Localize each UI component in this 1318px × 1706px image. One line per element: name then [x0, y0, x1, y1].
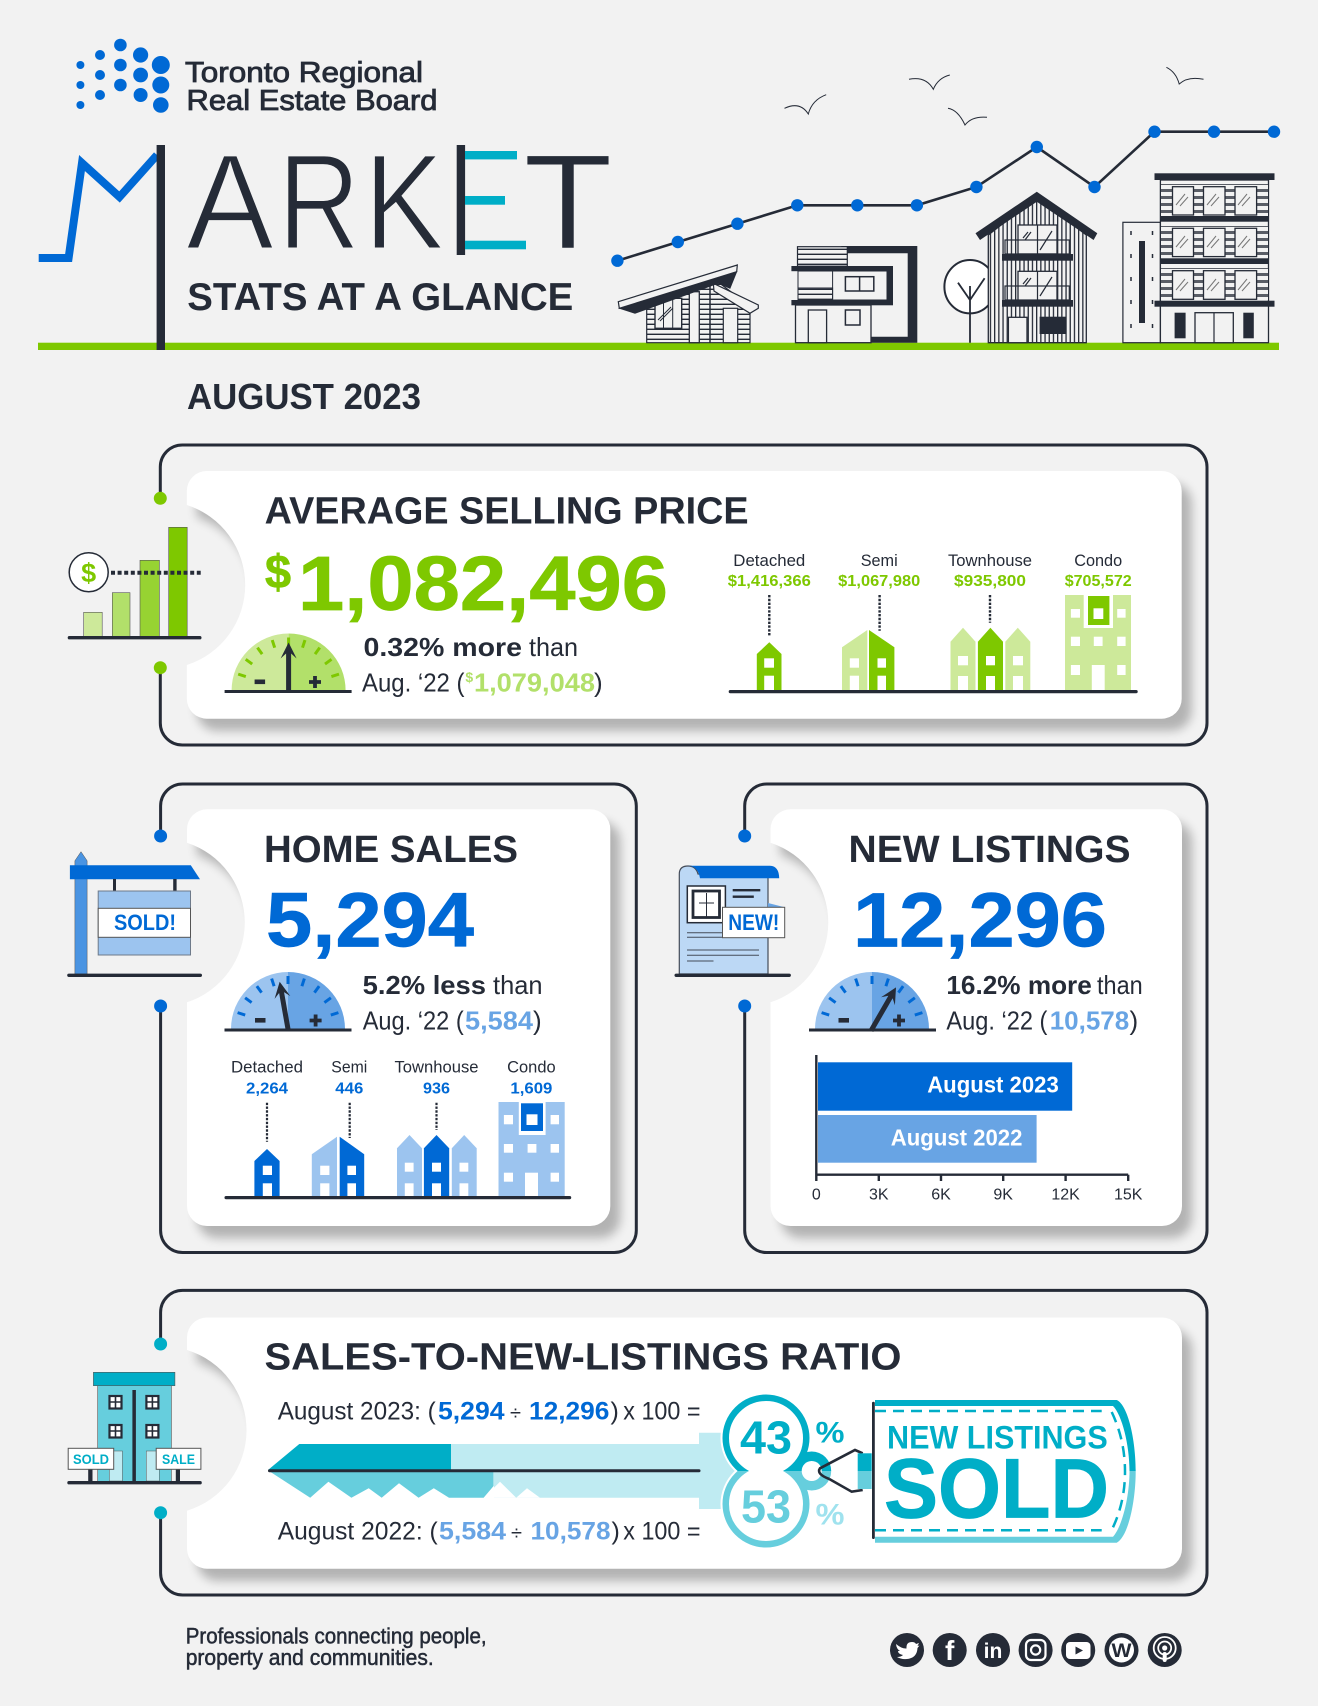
- formula: August 2022: ÷: [511, 1522, 522, 1544]
- logo wordmark: Toronto Regional: [185, 57, 423, 89]
- tag string: [819, 1450, 863, 1492]
- type values: $1,416,366: [728, 573, 811, 590]
- type values: $1,067,980: [838, 573, 920, 590]
- card shadow: [197, 483, 1192, 731]
- title letter E: [457, 145, 526, 255]
- percent 53: %: [816, 1498, 844, 1531]
- icon: facebook: [933, 1633, 967, 1667]
- panel outline: [161, 784, 636, 1252]
- formula: August 2022: August 2022: (: [278, 1517, 438, 1545]
- value 53: 53: [741, 1480, 791, 1532]
- type values: [246, 1080, 552, 1097]
- icon: townhouse: [397, 1135, 477, 1197]
- icon: podcast: [1148, 1633, 1182, 1667]
- axis labels: 9K: [993, 1186, 1013, 1203]
- type labels: Townhouse: [394, 1058, 478, 1077]
- social media icons: [890, 1633, 1182, 1667]
- comparison text: ): [533, 1005, 542, 1035]
- logo wordmark: Real Estate Board: [186, 85, 438, 117]
- icon: apartment for sale: [67, 1372, 202, 1484]
- comparison text: 16.2% more: [946, 970, 1092, 1000]
- panel: sales-to-new-listings ratio: [67, 1290, 1207, 1595]
- comparison text: Aug. ‘22 (: [363, 1005, 464, 1035]
- panel: new listings: [674, 784, 1207, 1252]
- birds: [784, 67, 1204, 125]
- tree: [944, 260, 996, 343]
- comparison text: $: [465, 669, 473, 685]
- house: modern block: [791, 246, 917, 343]
- panel outline: [745, 784, 1207, 1252]
- footer tagline: [186, 1623, 487, 1670]
- subtitle: STATS AT A GLANCE: [187, 276, 573, 319]
- type labels: Townhouse: [948, 551, 1032, 570]
- key graphic: [268, 1433, 740, 1509]
- type labels: Condo: [1074, 551, 1122, 570]
- tag label: new listings: NEW LISTINGS: [887, 1419, 1108, 1455]
- connector dots: [154, 830, 167, 1012]
- title letters ARK: A: [186, 126, 274, 278]
- panel outline: [160, 445, 1207, 745]
- comparison text: 5,584: [465, 1005, 534, 1035]
- card shadow: [197, 1330, 1192, 1581]
- panel: average selling price: [68, 445, 1207, 745]
- type values: [728, 573, 1132, 590]
- comparison text: [946, 970, 1143, 1035]
- axis labels: 3K: [869, 1186, 889, 1203]
- icon: facebook: f: [945, 1635, 955, 1666]
- title letters ARK: K: [364, 126, 444, 278]
- bar: August 2022: [818, 1115, 1037, 1163]
- formula: August 2023: 12,296: [529, 1397, 609, 1425]
- title stem: [157, 145, 165, 350]
- comparison text: than: [1097, 970, 1143, 1000]
- bar chart: new listings comparison: [812, 1055, 1143, 1203]
- title letters ARK: R: [278, 126, 360, 278]
- big value: 5,294: [266, 878, 474, 964]
- comparison text: Aug. ‘22 (: [362, 668, 465, 698]
- key bow: 43 and 53 percent: [720, 1392, 844, 1550]
- icon: linkedin: in: [984, 1640, 1002, 1663]
- formula: August 2022: x 100 =: [623, 1517, 700, 1545]
- axis labels: 15K: [1114, 1186, 1143, 1203]
- icon: wordpress: [1104, 1633, 1138, 1667]
- comparison text: 1,079,048: [474, 668, 595, 698]
- card: [187, 471, 1182, 719]
- title letters ARK: [186, 126, 444, 278]
- comparison text: 0.32% more: [364, 632, 522, 662]
- logo dots: [76, 39, 170, 113]
- icon: condo: [498, 1102, 565, 1197]
- title: MARKET: [39, 126, 613, 350]
- icon: condo: [1065, 595, 1131, 690]
- comparison text: [363, 970, 542, 1035]
- formula: August 2023: x 100 =: [623, 1397, 700, 1425]
- big value: $: [265, 545, 291, 598]
- line graph over houses: [611, 126, 1280, 267]
- footer tagline: Professionals connecting people,: [186, 1623, 487, 1648]
- title letter M as line graph: [39, 155, 157, 258]
- house: slanted roof: [618, 265, 758, 343]
- icon: townhouse: [950, 628, 1030, 690]
- comparison text: than: [493, 970, 542, 1000]
- panel: home sales: [67, 784, 636, 1252]
- panel outline: [161, 1290, 1207, 1595]
- formula: August 2023: ÷: [510, 1402, 521, 1424]
- connector dots: [154, 492, 167, 674]
- type labels: Detached: [231, 1058, 303, 1077]
- title letter T: T: [523, 126, 613, 278]
- logo: Toronto Regional Real Estate Board: [76, 39, 438, 117]
- breakdown: sales by home type: [224, 1058, 571, 1199]
- gauge: [809, 972, 936, 1035]
- type labels: Semi: [331, 1058, 367, 1077]
- type labels: [733, 551, 1122, 570]
- comparison text: [362, 632, 603, 698]
- axis labels: 0: [812, 1186, 821, 1203]
- icon: sold sign: SOLD!: [114, 910, 176, 935]
- type values: 1,609: [510, 1080, 552, 1097]
- connector dots: [738, 830, 751, 1012]
- icon: twitter: [890, 1633, 924, 1667]
- gauge: [225, 634, 352, 693]
- comparison text: than: [529, 632, 578, 662]
- icon: detached house: [254, 1149, 280, 1197]
- icon: detached house: [757, 642, 782, 690]
- comparison text: ): [1130, 1005, 1138, 1035]
- type values: 936: [423, 1080, 450, 1097]
- heading: SALES-TO-NEW-LISTINGS RATIO: [264, 1336, 902, 1378]
- heading: NEW LISTINGS: [848, 829, 1130, 871]
- bar: August 2023: [818, 1062, 1072, 1111]
- card: [187, 1318, 1182, 1569]
- comparison text: 10,578: [1050, 1005, 1129, 1035]
- icon: wordpress: W: [1112, 1641, 1132, 1662]
- axis labels: [812, 1186, 1143, 1203]
- ground line: [38, 343, 1279, 350]
- icon: youtube: [1061, 1633, 1095, 1667]
- type labels: Condo: [507, 1058, 556, 1077]
- formula: August 2023: ): [610, 1397, 619, 1425]
- icon: semi house: [842, 630, 894, 690]
- sold tag: [858, 1400, 1136, 1543]
- bar: August 2023: August 2023: [927, 1072, 1059, 1098]
- icon: new listing sheet: NEW!: [728, 910, 779, 935]
- icon: instagram: [1019, 1633, 1053, 1667]
- icon: new listing sheet: [674, 866, 791, 977]
- axis labels: 6K: [931, 1186, 951, 1203]
- icon: apartment for sale: SALE: [162, 1451, 195, 1467]
- heading: HOME SALES: [264, 829, 518, 871]
- logo wordmark: [185, 57, 438, 117]
- date: AUGUST 2023: [187, 376, 421, 417]
- card: [187, 809, 610, 1226]
- formula: August 2023: 5,294: [438, 1397, 505, 1425]
- formula: August 2023: August 2023: (: [278, 1397, 436, 1425]
- bar: August 2022: August 2022: [891, 1124, 1022, 1150]
- card: [770, 809, 1182, 1226]
- icon: apartment for sale: SOLD: [73, 1451, 109, 1467]
- comparison text: Aug. ‘22 (: [946, 1005, 1048, 1035]
- comparison text: ): [594, 668, 603, 698]
- value 43: 43: [740, 1411, 792, 1463]
- formula: August 2023: [278, 1397, 700, 1425]
- breakdown: price by home type: [728, 551, 1138, 693]
- icon: semi house: [312, 1137, 364, 1197]
- type values: 446: [335, 1080, 363, 1097]
- big value: 12,296: [853, 878, 1107, 964]
- house: gabled with balconies: [976, 192, 1097, 343]
- icon: sold sign: [67, 852, 202, 977]
- formula: August 2022: 5,584: [439, 1517, 506, 1545]
- formula: August 2022: [278, 1517, 700, 1545]
- formula: August 2022: 10,578: [530, 1517, 611, 1545]
- big value: 1,082,496: [298, 541, 668, 627]
- axis labels: 12K: [1051, 1186, 1080, 1203]
- gauge: [224, 972, 352, 1032]
- footer tagline: property and communities.: [186, 1645, 434, 1670]
- percent 43: %: [816, 1416, 844, 1449]
- type labels: Semi: [861, 551, 898, 570]
- formula: August 2022: ): [612, 1517, 620, 1545]
- icon: linkedin: [976, 1633, 1010, 1667]
- type labels: [231, 1058, 556, 1077]
- type values: $935,800: [954, 573, 1026, 590]
- heading: AVERAGE SELLING PRICE: [265, 490, 749, 532]
- type labels: Detached: [733, 551, 805, 570]
- building: apartment: [1123, 173, 1274, 343]
- tag label: sold: SOLD: [884, 1442, 1109, 1536]
- type values: 2,264: [246, 1080, 288, 1097]
- connector dots: [154, 1338, 167, 1519]
- card shadow: [197, 821, 620, 1238]
- type values: $705,572: [1065, 573, 1132, 590]
- icon: rising bars with dollar: [68, 527, 202, 639]
- card shadow: [780, 821, 1192, 1238]
- comparison text: 5.2% less: [363, 970, 486, 1000]
- icon: rising bars with dollar: $: [81, 558, 96, 588]
